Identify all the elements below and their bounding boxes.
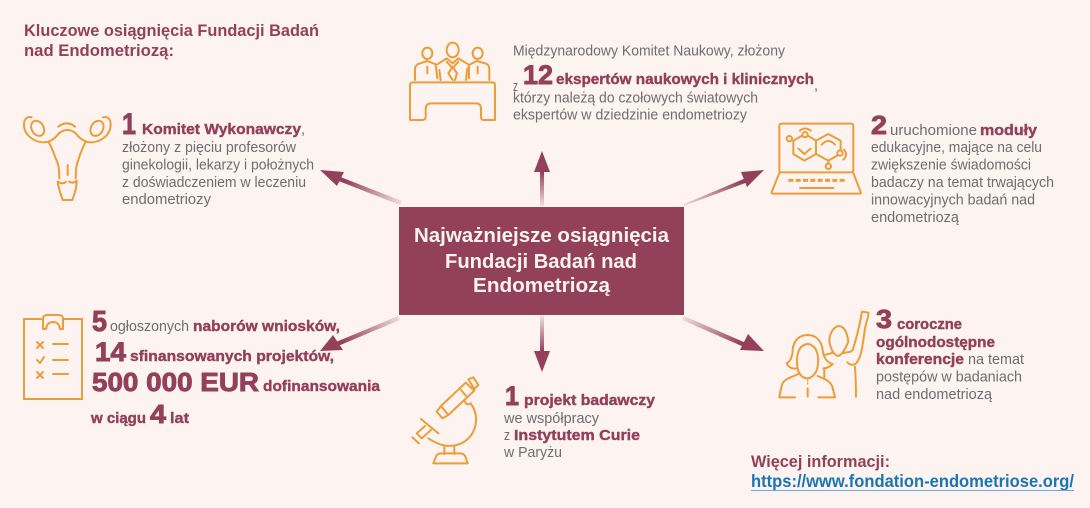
text block: educational modules: badaczy na temat trwających bbox=[871, 175, 1054, 191]
text block: educational modules: endometriozą bbox=[871, 210, 960, 226]
text block: funding calls and projects: sfinansowanych projektów, bbox=[130, 348, 334, 365]
arrow: to educational modules bbox=[681, 170, 764, 207]
text block: conferences: konferencje bbox=[876, 351, 964, 368]
text block: international scientific committee: z bbox=[513, 79, 518, 95]
text block: international scientific committee: , bbox=[814, 78, 818, 94]
text block: international scientific committee: którzy należą do czołowych światowych bbox=[513, 90, 758, 106]
text block: international scientific committee: ekspertów naukowych i klinicznych bbox=[556, 71, 814, 88]
text block: research project: 1 bbox=[505, 381, 519, 411]
more information link: https://www.fondation-endometriose.org/ bbox=[751, 471, 1074, 491]
icon: laptop with molecule bbox=[772, 124, 861, 194]
text block: funding calls and projects: 14 bbox=[95, 337, 126, 367]
text block: educational modules: 2 bbox=[871, 110, 887, 140]
arrow: to funding calls bbox=[320, 316, 400, 351]
text block: executive committee: z doświadczeniem w leczeniu bbox=[122, 175, 306, 191]
text block: funding calls and projects bbox=[90, 306, 381, 429]
text block: executive committee: endometriozy bbox=[122, 192, 212, 208]
text block: funding calls and projects: ogłoszonych bbox=[110, 319, 189, 335]
more information link: Więcej informacji: bbox=[751, 452, 890, 471]
text block: executive committee: złożony z pięciu profesorów bbox=[122, 140, 297, 156]
more information link bbox=[751, 452, 1074, 491]
text block: funding calls and projects: 500 000 EUR bbox=[92, 367, 259, 397]
text block: educational modules: zwiększenie świadomości bbox=[871, 158, 1031, 174]
text block: research project: w Paryżu bbox=[503, 445, 562, 461]
text block: executive committee: 1 bbox=[122, 108, 136, 141]
text block: conferences bbox=[876, 304, 1024, 403]
icon: microscope bbox=[412, 377, 478, 463]
text block: international scientific committee: ekspertów w dziedzinie endometriozy bbox=[513, 108, 748, 124]
text block: funding calls and projects: dofinansowania bbox=[263, 378, 381, 395]
text block: educational modules: moduły bbox=[980, 122, 1038, 139]
text block: conferences: nad endometriozą bbox=[876, 387, 993, 403]
text block: conferences: coroczne bbox=[897, 316, 962, 333]
text block: international scientific committee: 12 bbox=[523, 60, 553, 90]
text block: conferences: postępów w badaniach bbox=[876, 370, 1022, 386]
central box: Najważniejsze osiągnięcia bbox=[414, 225, 670, 247]
text block: executive committee bbox=[122, 108, 314, 208]
text block: international scientific committee bbox=[513, 44, 818, 124]
text block: research project: Instytutem Curie bbox=[514, 427, 640, 444]
text block: educational modules: uruchomione bbox=[890, 123, 977, 139]
text block: research project: projekt badawczy bbox=[524, 392, 656, 409]
text block: funding calls and projects: 5 bbox=[92, 306, 107, 338]
arrow: to scientific committee bbox=[534, 151, 550, 206]
text block: educational modules bbox=[871, 110, 1054, 226]
text block: educational modules: edukacyjne, mające na celu bbox=[871, 140, 1042, 156]
text block: funding calls and projects: lat bbox=[170, 410, 189, 427]
text block: research project: we współpracy bbox=[503, 411, 600, 427]
icon: clipboard checklist bbox=[24, 315, 82, 399]
text block: research project: z bbox=[504, 428, 510, 444]
title bbox=[24, 21, 319, 60]
icon: women with raised hand bbox=[779, 312, 869, 397]
arrow: to executive committee bbox=[320, 170, 402, 205]
central box bbox=[399, 207, 684, 315]
text block: executive committee: ginekologii, lekarzy i położnych bbox=[122, 158, 314, 174]
text block: conferences: 3 bbox=[876, 304, 892, 334]
text block: conferences: ogólnodostępne bbox=[876, 334, 995, 351]
text block: executive committee: Komitet Wykonawczy bbox=[142, 121, 302, 138]
title: Kluczowe osiągnięcia Fundacji Badań bbox=[24, 21, 319, 40]
arrow: to conferences bbox=[682, 316, 764, 351]
arrow: to research project bbox=[534, 316, 550, 372]
text block: funding calls and projects: naborów wniosków, bbox=[193, 318, 340, 335]
text block: international scientific committee: Międzynarodowy Komitet Naukowy, złożony bbox=[513, 44, 786, 60]
icon: uterus bbox=[24, 117, 111, 200]
icon: scientific committee at table bbox=[410, 43, 495, 120]
central box: Endometriozą bbox=[473, 275, 611, 297]
text block: funding calls and projects: 4 bbox=[150, 399, 167, 429]
text block: executive committee: , bbox=[301, 122, 305, 138]
text block: research project bbox=[503, 381, 656, 461]
text block: funding calls and projects: w ciągu bbox=[90, 410, 146, 427]
text block: educational modules: innowacyjnych badań nad bbox=[871, 192, 1035, 208]
title: nad Endometriozą: bbox=[24, 41, 174, 60]
central box: Fundacji Badań nad bbox=[445, 251, 637, 273]
text block: conferences: na temat bbox=[968, 352, 1024, 368]
